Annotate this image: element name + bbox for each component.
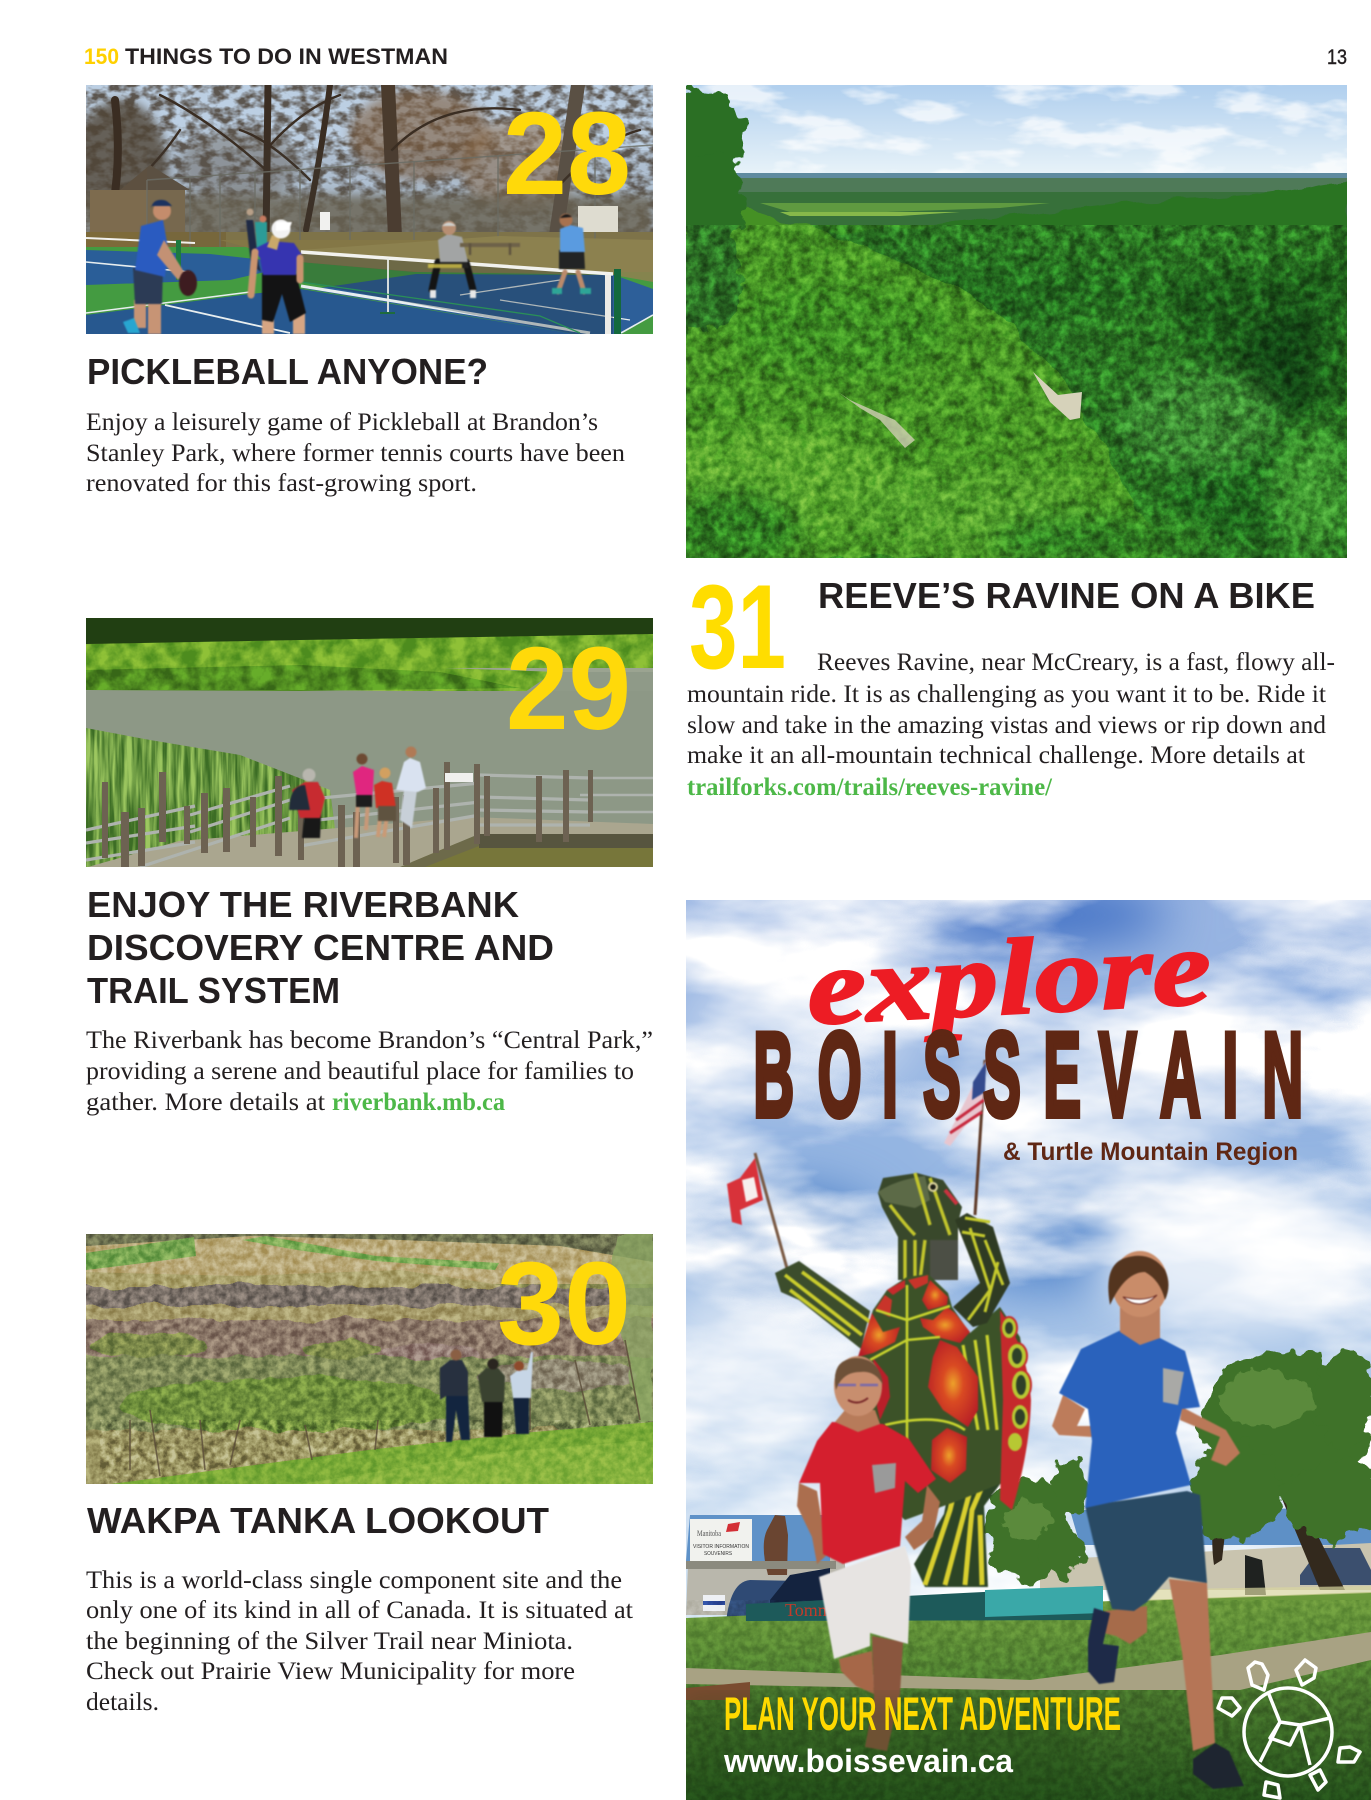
turtle statue [727,1060,1031,1587]
page header: running title: THINGS TO DO IN WESTMAN [125,44,448,69]
heading: riverbank discovery centre [87,884,554,1011]
body text: pickleball: Stanley Park, where former tennis courts have been [86,438,625,467]
flower base of statue: Tomm [785,1600,832,1620]
background buildings [686,1508,1371,1616]
heading: riverbank discovery centre: TRAIL SYSTEM [87,970,340,1011]
body text: riverbank: riverbank.mb.ca [332,1087,505,1116]
heading: reeve's ravine on a bike: REEVE’S RAVINE ON A BIKE [818,575,1315,616]
body text: wakpa tanka: only one of its kind in all of Canada. It is situated at [86,1595,633,1624]
turtle logo [1218,1660,1360,1798]
left arm [775,1261,870,1349]
darkening behind ad caption [686,1700,1086,1800]
photo: wakpa tanka lookout [86,1234,653,1484]
photo: riverbank boardwalk [86,618,653,867]
red shell panels [887,1280,905,1295]
background buildings: SOUVENIRS [704,1551,733,1557]
flag poles and flags [727,1060,986,1290]
ad script title: explore: explore [804,908,1214,1048]
heading: riverbank discovery centre: ENJOY THE RIVERBANK [87,884,519,925]
neck and head [878,1173,962,1280]
panel: item 29 riverbank [86,618,653,1116]
boy in red shirt [797,1356,940,1751]
body text: pickleball: renovated for this fast-growing sport. [86,468,477,497]
number 31: 31 [689,560,786,694]
flower base of statue [746,1586,1103,1621]
body text: riverbank [86,1025,653,1116]
shell body [858,1274,1030,1520]
body text: wakpa tanka: the beginning of the Silver Trail near Miniota. [86,1626,573,1655]
panel: item 28 pickleball [72,85,653,497]
body text: wakpa tanka: Check out Prairie View Municipality for more [86,1656,575,1685]
people at the lookout [440,1350,533,1442]
body text: reeves ravine: trailforks.com/trails/reeves-ravine/ [687,772,1053,801]
heading: riverbank discovery centre: DISCOVERY CENTRE AND [87,927,554,968]
body text: reeves ravine: slow and take in the amazing vistas and views or rip down and [687,710,1326,739]
body text: reeves ravine: Reeves Ravine, near McCreary, is a fast, flowy all- [817,647,1335,676]
number 29: 29 [506,623,631,755]
ad website: www.boissevain.ca [723,1743,1013,1779]
ad subtitle: & Turtle Mountain Region [1003,1138,1298,1166]
body text: pickleball [86,407,625,497]
body text: riverbank: providing a serene and beautiful place for families to [86,1056,634,1085]
panel: item 31 reeves ravine [660,85,1350,801]
right arm [953,1213,1010,1327]
body text: reeves ravine: make it an all-mountain technical challenge. More details at [687,740,1305,769]
panel: item 30 wakpa tanka [60,1234,680,1716]
body text: riverbank: The Riverbank has become Brandon’s “Central Park,” [86,1025,653,1054]
body text: riverbank: gather. More details at [86,1087,325,1116]
body text: reeves ravine: mountain ride. It is as challenging as you want it to be. Ride it [687,679,1326,708]
body text: wakpa tanka: This is a world-class single component site and the [86,1565,622,1594]
background buildings: VISITOR INFORMATION [693,1544,749,1550]
panel: Boissevain advertisement [670,885,1371,1800]
body text: pickleball: Enjoy a leisurely game of Pickleball at Brandon’s [86,407,598,436]
photo: pickleball courts [72,85,653,334]
number 28: 28 [503,88,631,220]
body text: reeves ravine [687,647,1335,801]
grass and path [686,1586,1371,1800]
body text: wakpa tanka: details. [86,1687,159,1716]
number 30: 30 [497,1238,631,1370]
page header: running title: 150 [84,44,119,69]
heading: wakpa tanka lookout: WAKPA TANKA LOOKOUT [87,1500,549,1541]
background buildings: Manitoba [697,1529,721,1538]
photo: reeves ravine forest [660,85,1350,570]
ad title: Boissevain: BOISSEVAIN [753,1007,1303,1142]
trees [988,1350,1371,1590]
ad photo: turtle statue and running boys [670,885,1371,1800]
heading: pickleball anyone: PICKLEBALL ANYONE? [87,351,488,392]
players [123,200,591,334]
page number: 13 [1327,46,1347,69]
body text: wakpa tanka [86,1565,633,1716]
people on the boardwalk [289,746,426,838]
legs [913,1483,1001,1588]
boy in blue shirt [1052,1251,1244,1789]
